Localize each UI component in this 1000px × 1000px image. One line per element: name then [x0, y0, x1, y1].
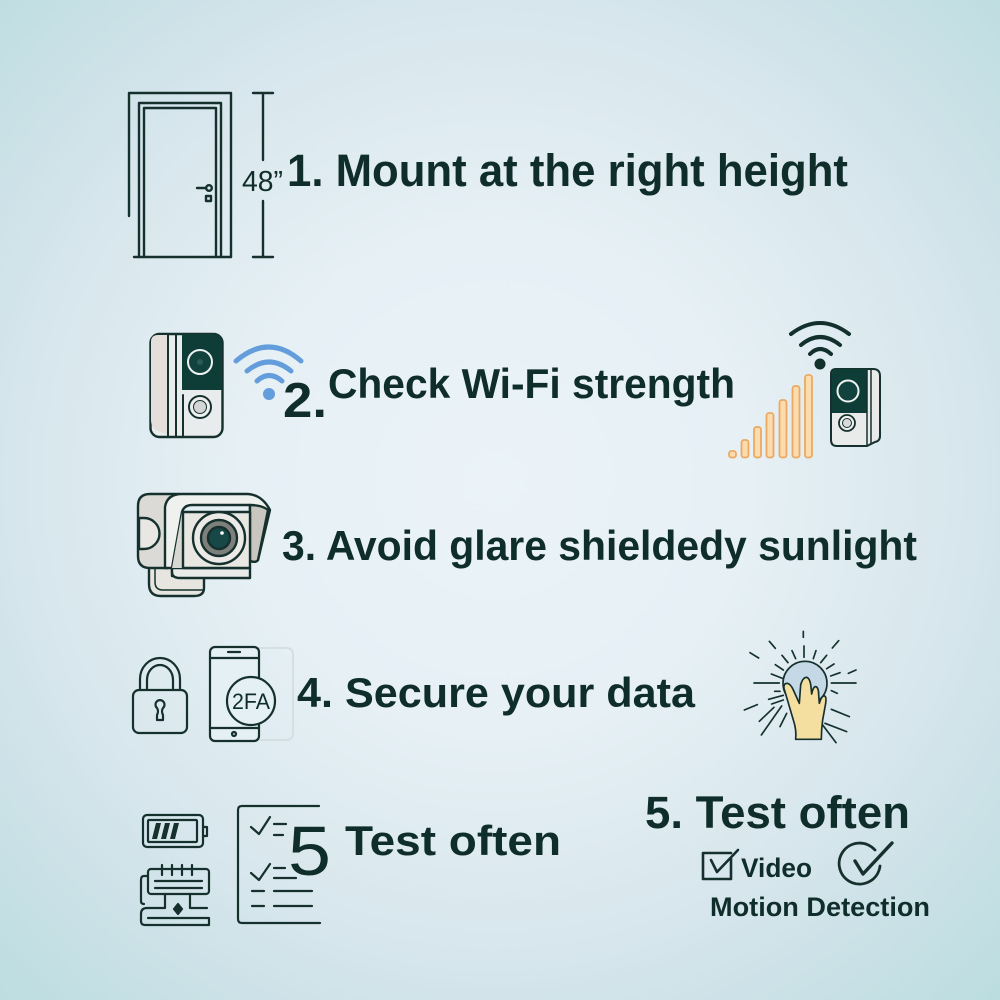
icon: signal bars [729, 375, 812, 458]
heading: step 1: 1. Mount at the right height [287, 145, 848, 196]
heading: step 2 number: 2. [283, 374, 327, 428]
icon: doorbell with dark Wi-Fi [791, 323, 880, 446]
icon: circled check [839, 843, 892, 884]
heading: step 2: Check Wi-Fi strength [328, 360, 735, 407]
icon: shielded camera [138, 494, 270, 596]
label: Motion Detection: Motion Detection [710, 892, 930, 922]
icon: padlock [133, 658, 187, 733]
label: Video: Video [741, 853, 812, 883]
heading: step 3: 3. Avoid glare shieldedy sunlight [282, 522, 917, 569]
icon: battery [143, 815, 207, 847]
overlapping number 5: 5 [288, 812, 331, 890]
icon: doorbell with blue Wi-Fi [150, 334, 301, 437]
icon: phone with 2FA badge [210, 647, 293, 741]
icon: mounting bracket [141, 865, 209, 925]
icon: checked box [703, 850, 738, 879]
icon: door with 48 inch height marker [129, 93, 283, 257]
heading: step 5: Test often [345, 817, 561, 864]
heading: step 5 duplicate: 5. Test often [645, 787, 910, 838]
icon: hand pressing button [744, 631, 856, 743]
icon: phone with 2FA badge: 2FA [232, 689, 270, 714]
icon: checklist [238, 806, 320, 923]
heading: step 4: 4. Secure your data [297, 669, 696, 716]
icon: door with 48 inch height marker: 48” [242, 166, 283, 198]
